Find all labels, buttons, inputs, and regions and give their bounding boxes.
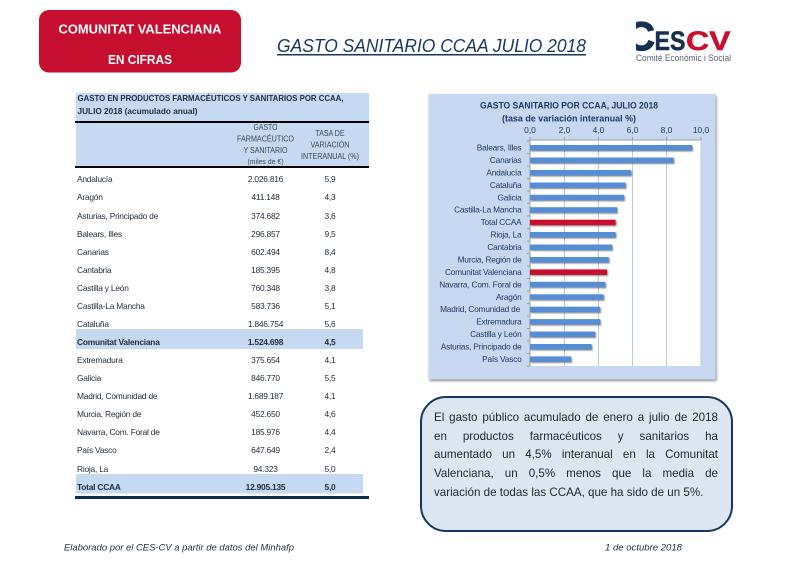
table rows: 4,1 <box>325 391 336 401</box>
logo: CES-CV: Comité Econòmic i Social <box>636 53 731 64</box>
table rows: Galicia <box>77 373 102 383</box>
chart category labels: Castilla y León <box>470 329 522 339</box>
table column headers: (miles de €) <box>248 159 284 166</box>
table rows: 4,8 <box>325 265 336 275</box>
bar chart panel: gasto sanitario por CCAA <box>428 94 716 380</box>
table rows: 4,1 <box>325 355 336 365</box>
chart axis labels: 0,0 <box>524 125 536 135</box>
table rows: 8,4 <box>325 247 336 257</box>
chart category labels: Galicia <box>498 192 522 202</box>
table rows: País Vasco <box>77 445 117 455</box>
table rows: 4,3 <box>325 192 336 202</box>
table rows <box>77 174 336 474</box>
table column headers: Y SANITARIO <box>244 146 288 155</box>
table rows: 185.976 <box>251 427 280 437</box>
table rows: Madrid, Comunidad de <box>77 391 158 401</box>
table rows: 5,5 <box>325 373 336 383</box>
row: Comunitat Valenciana and total <box>77 337 336 492</box>
table title: JULIO 2018 (acumulado anual) <box>78 106 198 116</box>
table rows: 296.857 <box>251 229 280 239</box>
table rows: 5,6 <box>325 319 336 329</box>
chart axis labels: 4,0 <box>593 125 605 135</box>
footer source note: Elaborado por el CES-CV a partir de datos del Minhafp <box>64 542 294 554</box>
table rows: Murcia, Región de <box>77 409 142 419</box>
chart axis labels: 2,0 <box>559 125 571 135</box>
table rows: Extremadura <box>77 355 123 365</box>
table rows: 602.494 <box>251 247 280 257</box>
chart category labels: País Vasco <box>482 354 522 364</box>
table title <box>76 93 369 121</box>
callout text: en productos farmacéuticos y sanitarios ha <box>434 430 718 443</box>
table rows: 2.026.816 <box>248 174 284 184</box>
table rows: 3,6 <box>325 211 336 221</box>
chart category labels: Asturias, Principado de <box>441 342 522 352</box>
table rows: 94.323 <box>253 464 278 474</box>
table column headers: TASA DE <box>316 129 344 138</box>
table column headers: FARMACÉUTICO <box>237 134 294 144</box>
table rows: Canarias <box>77 247 109 257</box>
chart category labels: Canarias <box>490 155 522 165</box>
table rows: Asturias, Principado de <box>77 211 159 221</box>
table rows: Andalucía <box>77 174 113 184</box>
table column headers <box>75 121 369 168</box>
table rows: 2,4 <box>325 445 336 455</box>
table rows: 9,5 <box>325 229 336 239</box>
row highlight bands <box>76 329 363 494</box>
row: Comunitat Valenciana and total: 5,0 <box>325 482 336 492</box>
chart bars <box>530 145 692 362</box>
table title: GASTO EN PRODUCTOS FARMACÉUTICOS Y SANITARIOS POR CCAA, <box>78 93 344 103</box>
table rows: 583.736 <box>251 301 280 311</box>
table rows: 452.650 <box>251 409 280 419</box>
table rows: 4,6 <box>325 409 336 419</box>
callout box background <box>420 396 733 532</box>
table rows: 5,0 <box>325 464 336 474</box>
chart category labels: Cantabria <box>487 242 522 252</box>
table rows: 185.395 <box>251 265 280 275</box>
logo: CES-CV <box>636 21 731 61</box>
header badge: Comunitat Valenciana en cifras: EN CIFRAS <box>108 52 172 67</box>
table rows: 1.689.187 <box>248 391 284 401</box>
table column headers: VARIACIÓN <box>310 140 350 150</box>
table column headers: GASTO <box>254 123 278 132</box>
chart category labels: Rioja, La <box>491 230 522 240</box>
table rows: Rioja, La <box>77 464 109 474</box>
header badge: Comunitat Valenciana en cifras: COMUNITAT VALENCIANA <box>58 22 222 36</box>
table rows: 647.649 <box>251 445 280 455</box>
chart category labels: Comunitat Valenciana <box>445 267 522 277</box>
table rows: Castilla y León <box>77 283 129 293</box>
row: Comunitat Valenciana and total: 12.905.135 <box>246 482 286 492</box>
table rows: Aragón <box>77 192 103 202</box>
table rows: 4,4 <box>325 427 336 437</box>
logo: CES-CV: CV <box>686 26 730 56</box>
callout text: El gasto público acumulado de enero a julio de 2018 <box>434 411 718 424</box>
callout text: variación de todas las CCAA, que ha sido de un 5%. <box>434 486 703 499</box>
table rows: Navarra, Com. Foral de <box>77 427 160 437</box>
table rows: 1.846.754 <box>248 319 284 329</box>
logo: CES-CV: ES <box>654 26 686 56</box>
table rows: 5,1 <box>325 301 336 311</box>
table rows: 374.682 <box>251 211 280 221</box>
logo: CES-CV: C <box>626 15 655 59</box>
chart axis labels <box>524 125 709 135</box>
chart category labels: Aragón <box>496 292 522 302</box>
chart category labels: Andalucía <box>486 168 522 178</box>
table rows: 5,9 <box>325 174 336 184</box>
chart category labels: Balears, Illes <box>477 142 522 152</box>
chart axis labels: 8,0 <box>661 125 673 135</box>
callout text: aumentado un 4,5% interanual en la Comunitat <box>434 448 718 461</box>
chart title: (tasa de variación interanual %) <box>502 114 636 124</box>
table rows: Cataluña <box>77 319 109 329</box>
chart category labels: Castilla-La Mancha <box>454 205 522 215</box>
table rows: 3,8 <box>325 283 336 293</box>
chart category labels <box>439 142 522 364</box>
table rows: 411.148 <box>251 192 280 202</box>
table rows: Castilla-La Mancha <box>77 301 145 311</box>
chart axis labels: 10,0 <box>693 125 709 135</box>
chart category labels: Madrid, Comunidad de <box>440 304 521 314</box>
table column headers: INTERANUAL (%) <box>301 152 359 161</box>
row: Comunitat Valenciana and total: Total CCAA <box>77 482 121 492</box>
chart axis labels: 6,0 <box>627 125 639 135</box>
table rows: Balears, Illes <box>77 229 122 239</box>
chart category labels: Murcia, Región de <box>458 254 522 264</box>
chart title <box>480 100 658 124</box>
table rows: Cantabria <box>77 265 112 275</box>
table rows: 760.348 <box>251 283 280 293</box>
callout text <box>434 411 718 499</box>
main title: GASTO SANITARIO CCAA JULIO 2018 <box>277 36 586 56</box>
row: Comunitat Valenciana and total: Comunitat Valenciana <box>77 337 160 347</box>
chart title: GASTO SANITARIO POR CCAA, JULIO 2018 <box>480 100 658 112</box>
chart category labels: Total CCAA <box>481 217 522 227</box>
chart category labels: Cataluña <box>490 180 522 190</box>
row: Comunitat Valenciana and total: 4,5 <box>325 337 336 347</box>
chart category labels: Extremadura <box>476 317 522 327</box>
chart category labels: Navarra, Com. Foral de <box>439 279 522 289</box>
header badge: Comunitat Valenciana en cifras <box>39 10 241 72</box>
footer date: 1 de octubre 2018 <box>605 542 683 554</box>
row: Comunitat Valenciana and total: 1.524.698 <box>248 337 284 347</box>
table: gasto en productos farmacéuticos <box>75 93 369 499</box>
table rows: 846.770 <box>251 373 280 383</box>
table rows: 375.654 <box>251 355 280 365</box>
callout text: Valenciana, un 0,5% menos que la media de <box>434 467 718 480</box>
